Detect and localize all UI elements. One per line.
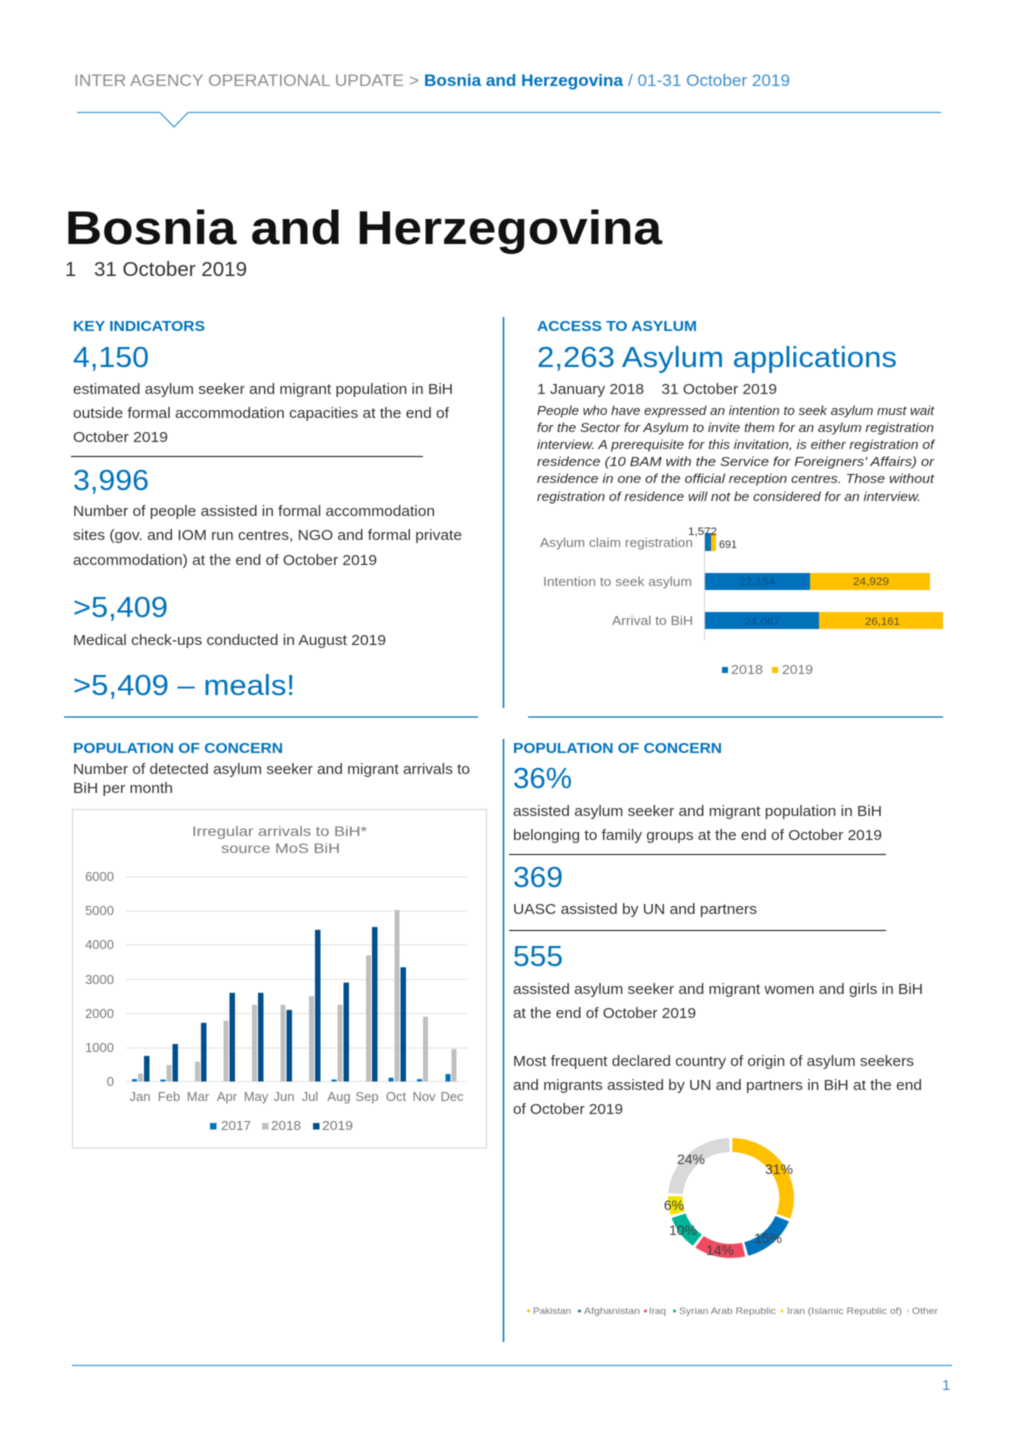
donut chart: country of origin: 15% — [754, 1230, 782, 1246]
stat: 555: 555 — [513, 941, 563, 973]
text: women and girls: assisted asylum seeker and migrant women and girls in BiH — [513, 981, 923, 998]
text: population outside accommodation — [73, 381, 453, 446]
text: asylum procedure note: registration of residence will not be considered for an interview. — [537, 489, 921, 504]
text: asylum procedure note: residence in one of the official reception centres. Those without — [537, 471, 936, 486]
bar chart: irregular arrivals per month: Dec — [440, 1089, 464, 1104]
legend: asylum chart: 2018 — [731, 662, 763, 677]
stat: 36%: 36% — [513, 763, 572, 795]
title: Bosnia and Herzegovina — [65, 201, 663, 254]
date subtitle: 1 — [65, 259, 76, 281]
stat: 369: 369 — [513, 862, 563, 894]
donut chart: country of origin: 31% — [765, 1161, 793, 1177]
text: population outside accommodation: estimated asylum seeker and migrant population in BiH — [73, 381, 453, 398]
legend: arrivals chart: 2017 — [221, 1118, 251, 1133]
bar chart: irregular arrivals per month: Irregular arrivals to BiH* — [192, 823, 368, 839]
bar chart: asylum stages 2018 vs 2019: Asylum claim registration — [540, 535, 693, 550]
donut chart: country of origin: 24% — [677, 1151, 705, 1167]
heading: access to asylum: ACCESS TO ASYLUM — [537, 319, 697, 335]
text: people assisted in formal accommodation: Number of people assisted in formal accommodation — [73, 503, 435, 520]
text: asylum procedure note: interview. A prerequisite for this invitation, is either registration of — [537, 437, 935, 452]
legend: arrivals chart: 2018 — [271, 1118, 301, 1133]
text: population outside accommodation: outside formal accommodation capacities at the end of — [73, 405, 450, 422]
text: date range: 1 January 2018 – 31 October 2019 — [537, 381, 777, 398]
legend: asylum chart: 2019 — [782, 662, 813, 677]
text: arrivals description: Number of detected asylum seeker and migrant arrivals to — [73, 761, 470, 778]
text: people assisted in formal accommodation — [73, 503, 462, 569]
text: arrivals description — [73, 761, 470, 797]
bar chart: irregular arrivals per month — [72, 810, 486, 1148]
heading: key indicators: KEY INDICATORS — [73, 319, 205, 335]
legend: arrivals chart: 2019 — [322, 1118, 353, 1133]
text: country of origin intro: and migrants assisted by UN and partners in BiH at the end — [513, 1077, 922, 1094]
text: asylum procedure note: residence (10 BAM with the Service for Foreigners' Affairs) or — [537, 454, 935, 469]
legend: country of origin: Pakistan — [533, 1306, 571, 1317]
page header breadcrumb: / 01-31 October 2019 — [628, 71, 790, 90]
bar chart: irregular arrivals per month: Jul — [302, 1089, 318, 1104]
page header breadcrumb — [74, 71, 790, 90]
legend: country of origin: Iraq — [649, 1306, 666, 1317]
page header breadcrumb: INTER AGENCY OPERATIONAL UPDATE > — [74, 71, 419, 90]
bar chart: irregular arrivals per month: 4000 — [85, 937, 114, 952]
bar chart: irregular arrivals per month: Nov — [412, 1089, 436, 1104]
panel: access to asylum — [537, 319, 943, 677]
text: family groups — [513, 803, 882, 844]
text: country of origin intro: of October 2019 — [513, 1101, 623, 1118]
donut chart: country of origin: 14% — [706, 1242, 734, 1258]
bar chart: irregular arrivals per month: Jun — [274, 1089, 294, 1104]
stat: medical check-ups: >5,409 — [73, 592, 168, 624]
bar chart: irregular arrivals per month: Jan — [130, 1089, 150, 1104]
stat: 4,150: 4,150 — [73, 342, 149, 374]
panel: key indicators — [71, 319, 462, 702]
bar chart: irregular arrivals per month: Sep — [355, 1089, 379, 1104]
text: family groups: assisted asylum seeker and migrant population in BiH — [513, 803, 882, 820]
bar chart: asylum stages 2018 vs 2019: 24,067 — [744, 616, 780, 628]
bar chart: asylum stages 2018 vs 2019: 1,572 — [688, 526, 717, 538]
bar chart: irregular arrivals per month: 3000 — [85, 972, 114, 987]
bar chart: asylum stages 2018 vs 2019 — [540, 526, 943, 677]
legend: country of origin — [527, 1306, 938, 1317]
legend: asylum chart — [722, 662, 813, 677]
donut chart: country of origin: 10% — [669, 1222, 697, 1238]
heading: population of concern right: POPULATION OF CONCERN — [513, 741, 722, 757]
page number: 1 — [942, 1377, 950, 1394]
bar chart: irregular arrivals per month: Apr — [217, 1089, 238, 1104]
legend: country of origin: Syrian Arab Republic — [679, 1306, 776, 1317]
bar chart: asylum stages 2018 vs 2019: Arrival to BiH — [612, 613, 693, 628]
text: asylum procedure note: People who have expressed an intention to seek asylum must wait — [537, 403, 935, 418]
bar chart: asylum stages 2018 vs 2019: 26,161 — [865, 616, 900, 628]
panel: population of concern, arrivals — [72, 741, 486, 1148]
text: arrivals description: BiH per month — [73, 780, 173, 797]
legend: country of origin: Other — [912, 1306, 938, 1317]
bar chart: irregular arrivals per month: Feb — [158, 1089, 180, 1104]
bar chart: irregular arrivals per month: source MoS BiH — [221, 840, 340, 856]
text: medical check-ups: Medical check-ups conducted in August 2019 — [73, 632, 386, 649]
legend: country of origin: Afghanistan — [584, 1306, 640, 1317]
text: asylum procedure note — [537, 403, 936, 504]
bar chart: irregular arrivals per month: 2000 — [85, 1006, 114, 1021]
text: women and girls — [513, 981, 923, 1022]
bar chart: irregular arrivals per month: 5000 — [85, 903, 114, 918]
donut chart: country of origin: 6% — [664, 1197, 684, 1213]
header rule with notch — [77, 112, 941, 127]
date subtitle: – — [78, 259, 90, 281]
text: country of origin intro — [513, 1053, 922, 1118]
bar chart: irregular arrivals per month: Oct — [386, 1089, 406, 1104]
bar chart: irregular arrivals per month: 6000 — [85, 869, 114, 884]
page header breadcrumb: Bosnia and Herzegovina — [424, 71, 624, 90]
bar chart: asylum stages 2018 vs 2019: Intention to seek asylum — [543, 574, 692, 589]
bar chart: irregular arrivals per month: May — [244, 1089, 269, 1104]
text: family groups: belonging to family groups at the end of October 2019 — [513, 827, 882, 844]
panel: population of concern, assisted — [509, 741, 938, 1317]
bar chart: asylum stages 2018 vs 2019: 22,154 — [739, 576, 775, 588]
text: country of origin intro: Most frequent declared country of origin of asylum seekers — [513, 1053, 914, 1070]
text: women and girls: at the end of October 2019 — [513, 1005, 696, 1022]
date subtitle: 31 October 2019 — [94, 259, 247, 281]
stat: 3,996: 3,996 — [73, 465, 149, 497]
donut chart: country of origin — [664, 1145, 793, 1258]
text: population outside accommodation: October 2019 — [73, 429, 168, 446]
text: asylum procedure note: for the Sector for Asylum to invite them for an asylum registration — [537, 420, 934, 435]
heading: population of concern: POPULATION OF CONCERN — [73, 741, 283, 757]
text: UASC: UASC assisted by UN and partners — [513, 901, 757, 918]
bar chart: irregular arrivals per month: 1000 — [85, 1040, 114, 1055]
bar chart: irregular arrivals per month: Mar — [187, 1089, 210, 1104]
bar chart: irregular arrivals per month: 0 — [107, 1074, 114, 1089]
text: people assisted in formal accommodation: accommodation) at the end of October 2019 — [73, 552, 377, 569]
bar chart: asylum stages 2018 vs 2019: 24,929 — [853, 576, 889, 588]
stat: meals: >5,409 – meals! — [73, 670, 295, 702]
text: people assisted in formal accommodation: sites (gov. and IOM run centres, NGO and formal private — [73, 527, 462, 544]
legend: country of origin: Iran (Islamic Republic of) — [787, 1306, 902, 1317]
bar chart: irregular arrivals per month: Aug — [327, 1089, 351, 1104]
bar chart: asylum stages 2018 vs 2019: 691 — [719, 539, 737, 551]
legend: arrivals chart — [210, 1118, 353, 1133]
stat: asylum applications: 2,263 Asylum applications — [537, 342, 897, 374]
